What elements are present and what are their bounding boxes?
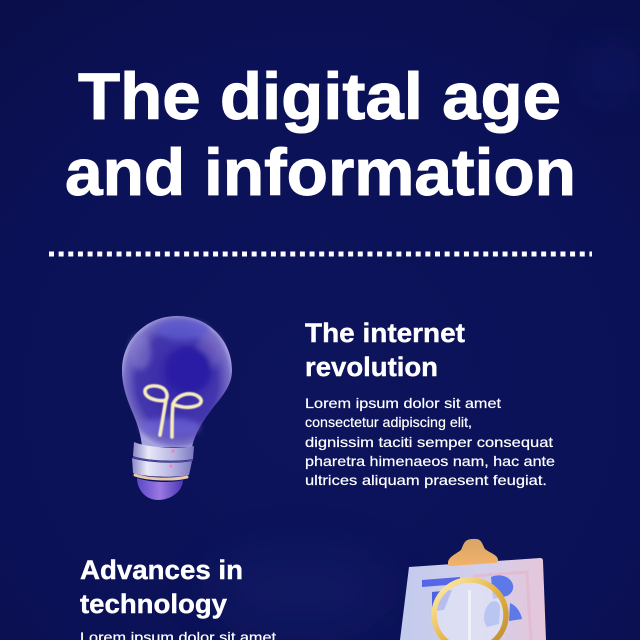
- magnifier lens: [435, 580, 505, 640]
- base shadow stripe: [133, 457, 193, 462]
- heading: advances in technology: Advances in: [80, 555, 243, 585]
- clipboard board: [400, 558, 546, 640]
- heading: advances in technology: technology: [80, 589, 227, 619]
- text block: internet revolution body: ultrices aliquam praesent feugiat.: [305, 472, 547, 488]
- text block: internet revolution body: dignissim taciti semper consequat: [305, 434, 553, 450]
- bulb cap: [137, 478, 183, 500]
- chart bars: [422, 577, 460, 587]
- title: The digital age: [78, 59, 561, 133]
- bulb glass: [122, 316, 232, 447]
- glass reflections: [129, 320, 223, 436]
- text block: internet revolution body: Lorem ipsum dolor sit amet: [305, 395, 501, 411]
- metal base: [133, 442, 194, 461]
- filament: [145, 386, 201, 437]
- clipboard clip: [448, 539, 498, 566]
- base rivets: [171, 449, 175, 453]
- magnifier highlight: [468, 590, 471, 640]
- heading: the internet revolution: revolution: [305, 352, 438, 382]
- magnifier ring: [434, 580, 506, 640]
- text block: internet revolution body: pharetra himenaeos nam, hac ante: [305, 453, 555, 469]
- title: [65, 59, 576, 209]
- heading: advances in technology: [80, 555, 243, 619]
- heading: the internet revolution: [305, 318, 465, 382]
- title: and information: [65, 135, 576, 209]
- dotted divider: [49, 252, 592, 256]
- base ring: [135, 475, 187, 479]
- text block: internet revolution body: consectetur adipiscing elit,: [305, 414, 472, 430]
- pie shapes: [491, 575, 513, 599]
- icon: clipboard with magnifier: [400, 539, 546, 640]
- icon: light bulb: [122, 316, 232, 500]
- text block: internet revolution body: [305, 395, 555, 488]
- clipboard inner edge: [473, 572, 531, 640]
- heading: the internet revolution: The internet: [305, 318, 465, 348]
